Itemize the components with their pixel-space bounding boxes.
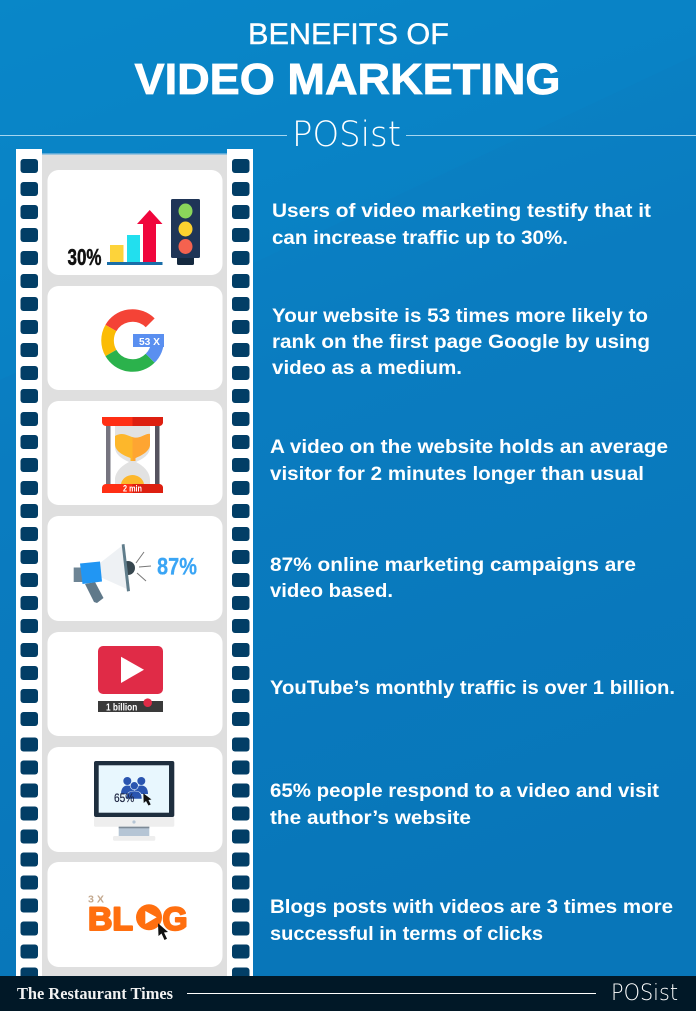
- icon: video player 1 billion: [98, 646, 163, 714]
- film strip: [16, 149, 253, 982]
- text: traffic: Users of video marketing testify that it: [272, 200, 652, 222]
- title: [134, 18, 560, 104]
- text: campaigns: 87% online marketing campaigns are: [270, 554, 636, 576]
- footer: [0, 976, 696, 1011]
- text: visitor time: visitor for 2 minutes longer than usual: [270, 463, 644, 485]
- icon: google G with 53 X: 53 X: [139, 337, 160, 348]
- label: 87%: 87%: [157, 554, 197, 580]
- text: campaigns: [270, 554, 636, 602]
- text: traffic: can increase traffic up to 30%.: [272, 227, 568, 249]
- text: traffic: [272, 200, 652, 249]
- title: BENEFITS OF: [248, 18, 449, 51]
- panel: hourglass: [48, 401, 222, 505]
- text: campaigns: video based.: [270, 580, 393, 602]
- text: google: [272, 305, 650, 379]
- icon: hourglass 2 min: 2 min: [123, 484, 142, 494]
- text: blogs: [270, 896, 673, 945]
- icon: hourglass 2 min: [102, 417, 163, 494]
- icon: video player 1 billion: 1 billion: [106, 702, 137, 714]
- text: blogs: Blogs posts with videos are 3 times more: [270, 896, 673, 918]
- title: VIDEO MARKETING: [134, 55, 560, 104]
- panel: youtube: [48, 632, 222, 736]
- header divider with POSist logo: POSist: [292, 115, 401, 155]
- film holes right: [232, 159, 250, 982]
- text: google: video as a medium.: [272, 357, 462, 379]
- icon: monitor 65% audience: 65%: [114, 791, 135, 805]
- icon: traffic light: [171, 199, 200, 265]
- panel: blog: [48, 862, 222, 967]
- icon: 3X BLOG: [88, 895, 188, 940]
- icon: monitor 65% audience: [94, 761, 174, 841]
- panel: traffic: [48, 170, 222, 275]
- icon: rising bars and arrow: [107, 210, 162, 265]
- label: 30%: 30%: [68, 244, 102, 270]
- icon: google G with 53 X: [108, 316, 164, 365]
- text: youtube: YouTube’s monthly traffic is over 1 billion.: [270, 677, 675, 699]
- text: visitor time: [270, 436, 668, 485]
- text: response: the author’s website: [270, 807, 471, 829]
- panel: monitor: [48, 747, 222, 852]
- icon: 3X BLOG: BL: [88, 901, 133, 937]
- text: visitor time: A video on the website holds an average: [270, 436, 668, 458]
- icon: megaphone: [74, 544, 151, 603]
- icon: 3X BLOG: 3 X: [88, 895, 104, 906]
- text: blogs: successful in terms of clicks: [270, 923, 543, 945]
- text: response: 65% people respond to a video and visit: [270, 780, 660, 802]
- footer: POSist: [611, 981, 678, 1006]
- panel: megaphone: [48, 516, 222, 621]
- film holes left: [20, 159, 38, 982]
- text: google: rank on the first page Google by using: [272, 331, 650, 353]
- icon: 3X BLOG: G: [162, 901, 188, 937]
- text: google: Your website is 53 times more likely to: [272, 305, 648, 327]
- footer: The Restaurant Times: [17, 984, 173, 1003]
- text: response: [270, 780, 660, 829]
- panel: google: [48, 286, 222, 390]
